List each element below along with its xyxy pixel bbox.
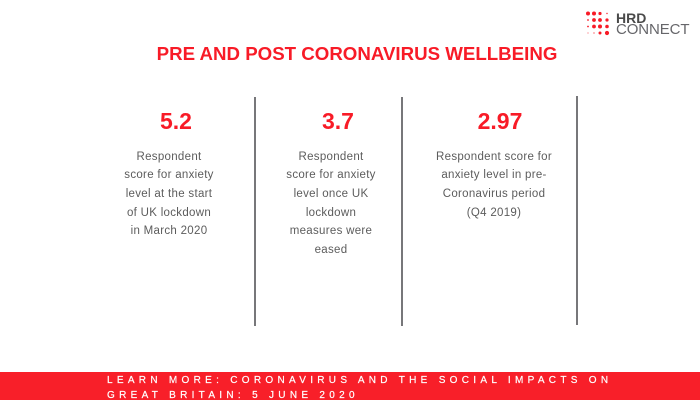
logo wordmark: CONNECT: CONNECT — [616, 21, 689, 38]
divider — [254, 97, 256, 326]
description: lockdown eased: level once UK — [294, 188, 368, 200]
description: lockdown eased: measures were — [290, 225, 372, 237]
logo wordmark: HRD: HRD — [616, 10, 646, 26]
description: start of lockdown: of UK lockdown — [127, 207, 211, 219]
divider — [576, 96, 578, 325]
description: lockdown eased: Respondent — [298, 150, 364, 162]
footer text — [107, 375, 612, 400]
description: pre-coronavirus — [436, 150, 552, 219]
description: lockdown eased — [286, 150, 376, 256]
title: PRE AND POST CORONAVIRUS WELLBEING — [157, 43, 557, 64]
logo: HRD Connect — [586, 10, 690, 38]
divider — [401, 97, 403, 326]
panel: start of lockdown score — [124, 108, 214, 237]
description: pre-coronavirus: Respondent score for — [436, 150, 552, 162]
footer text: LEARN MORE: CORONAVIRUS AND THE SOCIAL IMPACTS ON — [107, 375, 612, 386]
icon: red dot grid — [586, 12, 610, 36]
description: lockdown eased: lockdown — [306, 207, 356, 219]
stat: 5.2: 5.2 — [160, 108, 192, 134]
description: pre-coronavirus: anxiety level in pre- — [441, 169, 547, 181]
description: lockdown eased: eased — [315, 244, 347, 256]
description: start of lockdown — [124, 150, 214, 237]
stat: 2.97: 2.97 — [478, 108, 522, 134]
description: pre-coronavirus: (Q4 2019) — [467, 207, 521, 219]
description: pre-coronavirus: Coronavirus period — [443, 188, 545, 200]
panel: eased lockdown score — [286, 108, 376, 256]
description: start of lockdown: score for anxiety — [124, 169, 214, 181]
footer banner — [0, 372, 700, 400]
panel: pre-coronavirus score — [436, 108, 552, 219]
description: start of lockdown: Respondent — [136, 150, 202, 162]
description: start of lockdown: level at the start — [126, 188, 212, 200]
description: start of lockdown: in March 2020 — [131, 225, 207, 237]
stat: 3.7: 3.7 — [322, 108, 354, 134]
description: lockdown eased: score for anxiety — [286, 169, 376, 181]
